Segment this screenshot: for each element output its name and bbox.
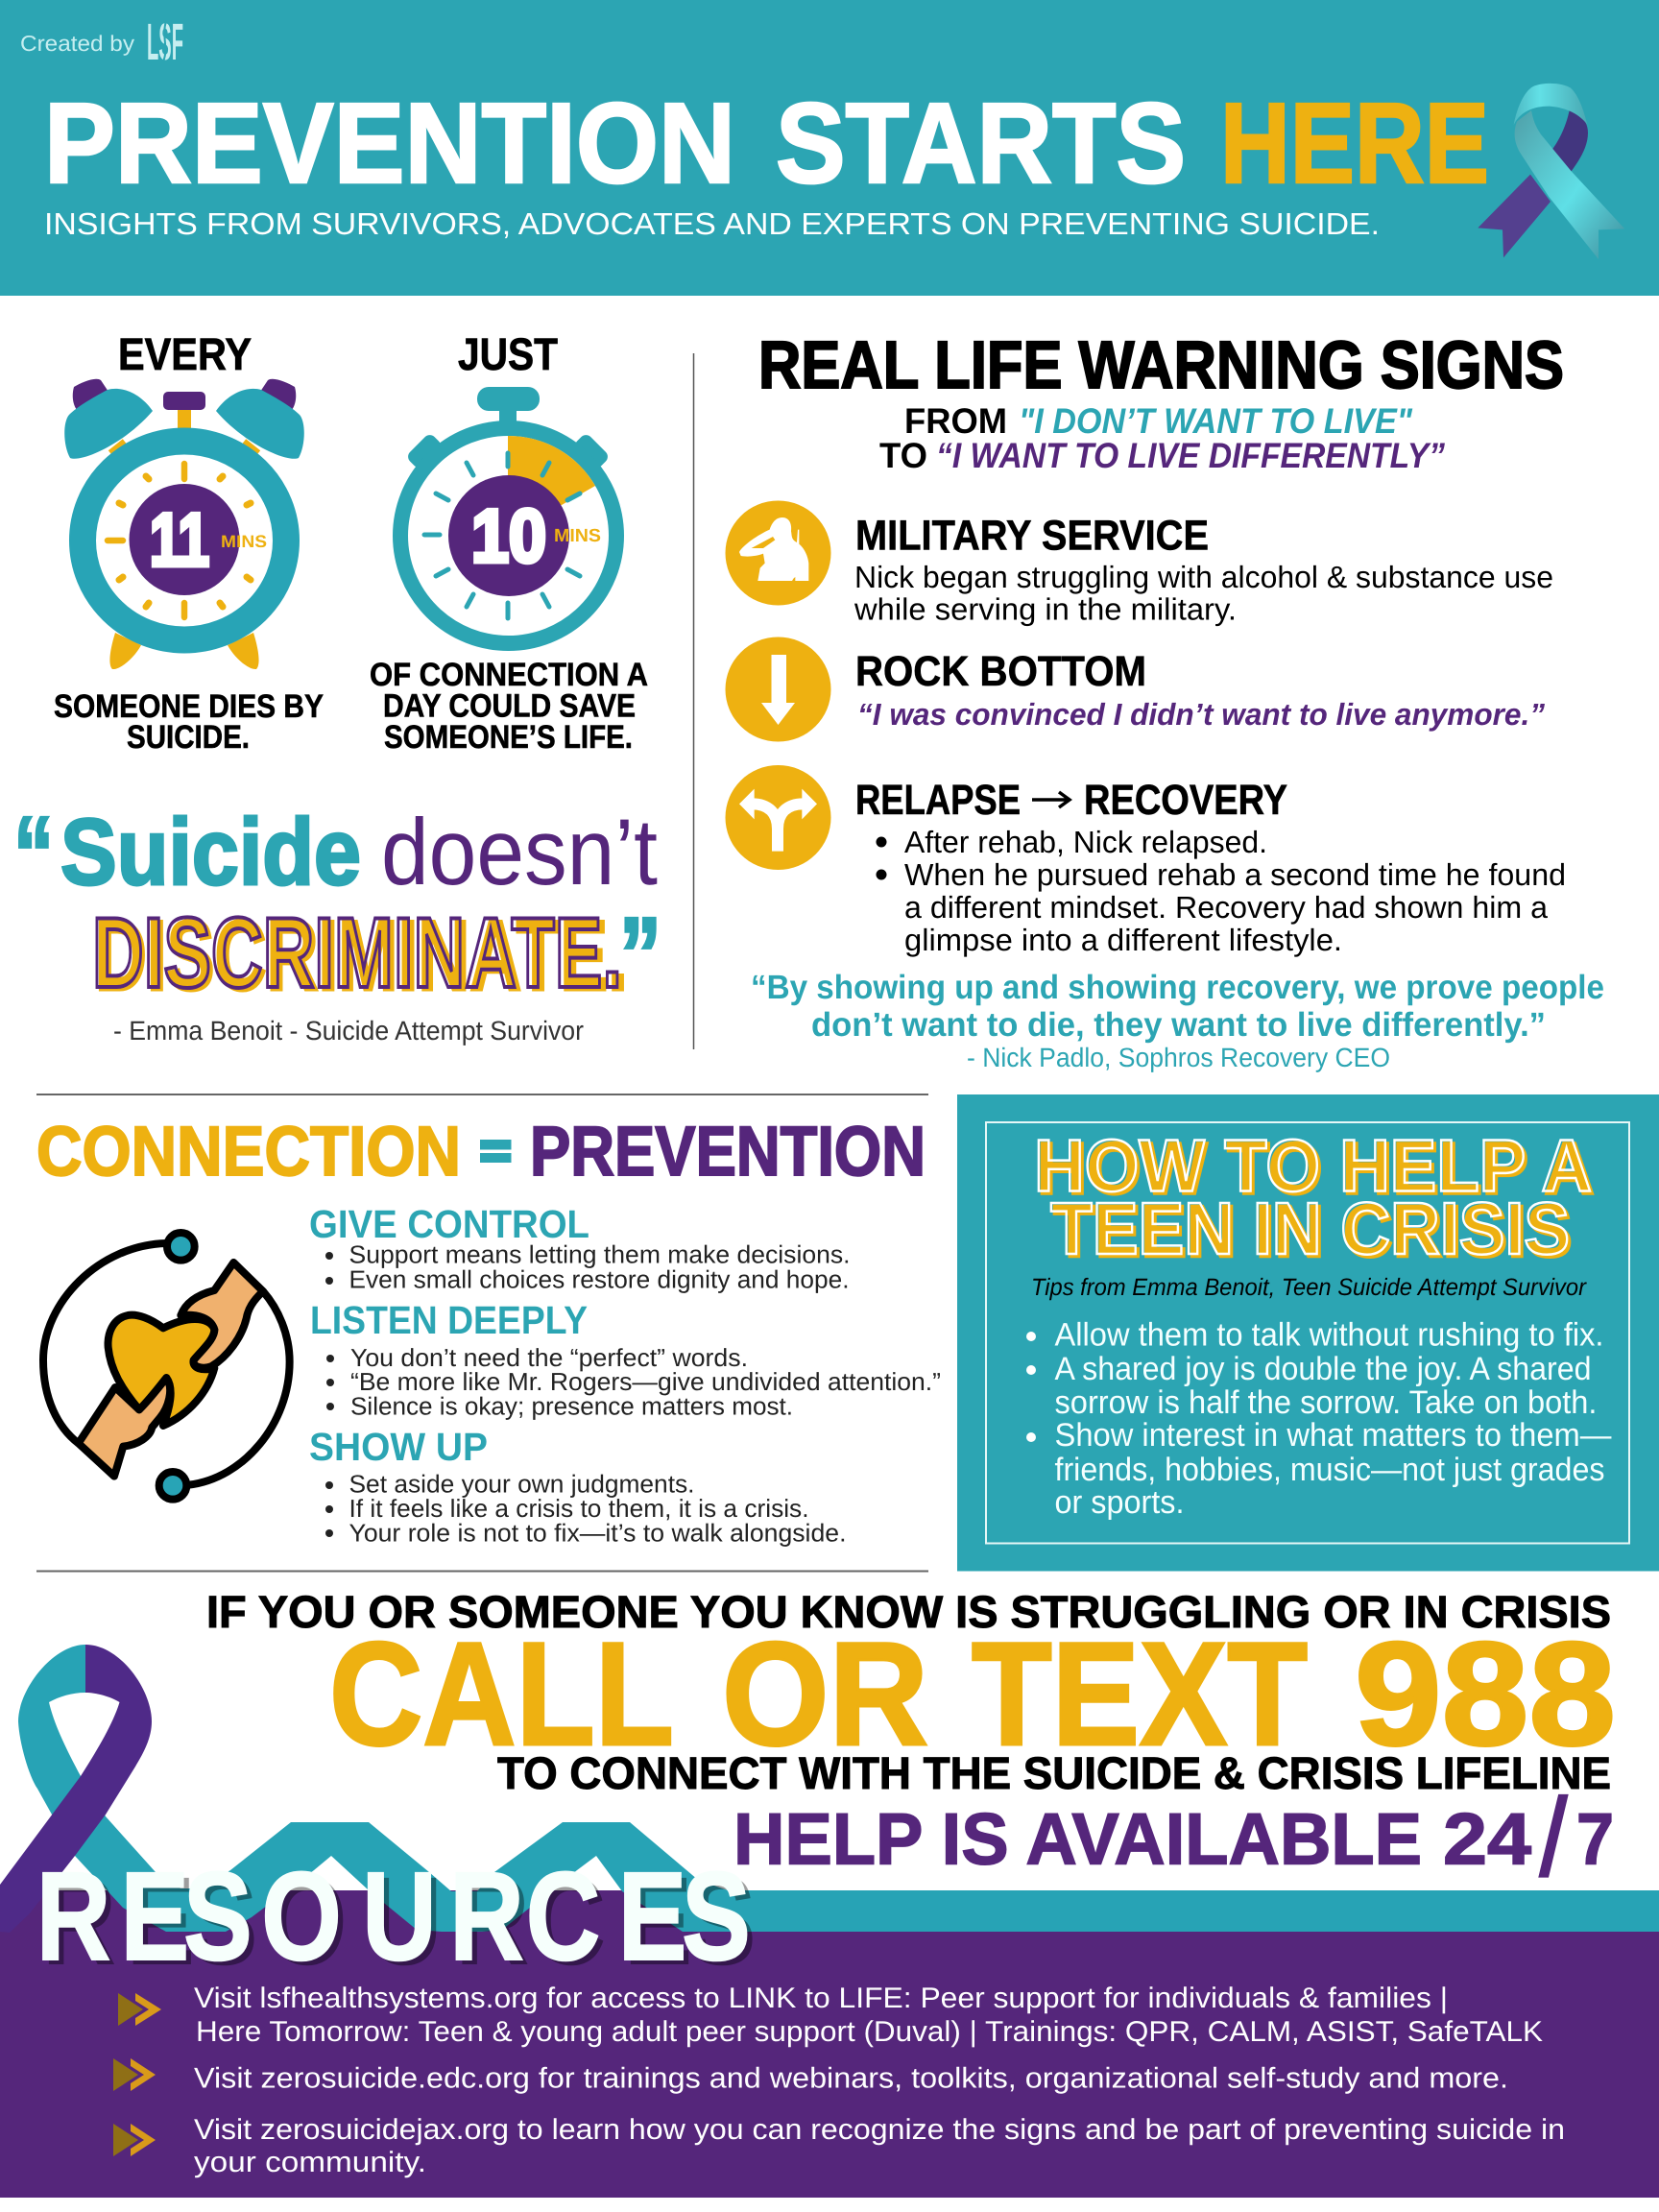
section: give control: Support means letting them make decisions.: [349, 1240, 851, 1269]
icon: purple ribbon strand: [0, 1645, 152, 1933]
call or text 988: 988: [1355, 1612, 1616, 1776]
icon: alarm clock 11 minutes: 11: [150, 497, 209, 582]
section: listen deeply: [310, 1298, 941, 1421]
icon: stopwatch 10 minutes: 10: [471, 493, 546, 578]
item: relapse to recovery: glimpse into a different lifestyle.: [904, 923, 1342, 957]
panel: call to action: HELP IS AVAILABLE: [733, 1799, 1422, 1880]
panel: header: LSF: [147, 13, 183, 71]
section: give control: Even small choices restore dignity and hope.: [349, 1265, 849, 1294]
heading: every: EVERY: [118, 328, 252, 379]
heading: TEEN IN CRISIS: [1053, 1190, 1573, 1273]
icon: down arrow: [726, 637, 831, 741]
section: listen deeply: Silence is okay; presence matters most.: [350, 1392, 793, 1421]
stat caption: connection: OF CONNECTION A: [370, 657, 648, 693]
icon: stopwatch 10 minutes: MINS: [554, 526, 601, 546]
panel: call to action: IF YOU OR SOMEONE YOU KNOW IS STRUGGLING OR IN CRISIS: [206, 1586, 1611, 1637]
quote: suicide doesn't discriminate: [13, 795, 661, 1046]
tips list: A shared joy is double the joy. A shared: [1054, 1351, 1592, 1387]
tips list: Allow them to talk without rushing to fix.: [1054, 1317, 1603, 1354]
resource item: lsf health systems: [118, 1983, 1543, 2048]
heading: TEEN IN CRISIS: [1050, 1188, 1570, 1270]
icon: awareness ribbon: [1478, 84, 1624, 259]
resource item: zero suicide jax: Visit zerosuicidejax.org to learn how you can recognize the signs and be part of preventing suicide in: [194, 2114, 1565, 2146]
section: show up: Your role is not to fix—it’s to walk alongside.: [349, 1519, 847, 1548]
icon: alarm clock 11 minutes: MINS: [221, 532, 267, 551]
tips list: Show interest in what matters to them—: [1054, 1417, 1611, 1454]
item: rock bottom: [855, 648, 1545, 732]
call or text 988: [329, 1612, 1616, 1776]
icon: alarm clock 11 minutes: [64, 379, 304, 669]
heading: HOW TO HELP A: [1037, 1127, 1595, 1210]
resource item: zero suicide jax: your community.: [194, 2147, 426, 2178]
subheading: Tips from Emma Benoit, Teen Suicide Attempt Survivor: [1031, 1274, 1588, 1301]
resource item: lsf health systems: Here Tomorrow: Teen & young adult peer support (Duval) | Trainings: QPR, CALM, ASIST, SafeTALK: [196, 2016, 1543, 2048]
created by credit: [20, 13, 183, 71]
subheading: [879, 401, 1445, 475]
stat caption: someone dies: SUICIDE.: [127, 719, 250, 756]
subheading: FROM: [904, 401, 1007, 441]
section: show up: Set aside your own judgments.: [349, 1469, 695, 1498]
title: HERE: [1220, 80, 1489, 207]
item: relapse to recovery: RECOVERY: [1084, 777, 1287, 824]
subtitle: INSIGHTS FROM SURVIVORS, ADVOCATES AND EXPERTS ON PREVENTING SUICIDE.: [44, 206, 1380, 241]
attribution: - Emma Benoit - Suicide Attempt Survivor: [113, 1016, 584, 1046]
item: relapse to recovery: a different mindset. Recovery had shown him a: [904, 890, 1548, 925]
outlined word: discriminate: DISCRIMINATE.: [95, 901, 628, 1012]
panel: suicide statistics: [54, 328, 648, 756]
section: listen deeply: You don’t need the “perfect” words.: [350, 1343, 748, 1372]
heading: HOW TO HELP A: [1034, 1125, 1592, 1208]
quote: suicide doesn't discriminate: doesn’t: [381, 799, 658, 904]
call or text 988: TEXT: [972, 1612, 1308, 1776]
resource item: zero suicide: Visit zerosuicide.edc.org for trainings and webinars, toolkits, organizational self-study and more.: [194, 2062, 1508, 2095]
stat caption: connection: [370, 657, 648, 756]
title: PREVENTION: [44, 80, 735, 207]
icon: forking arrows: [726, 765, 831, 870]
tips list: [1026, 1317, 1611, 1521]
stat caption: someone dies: SOMEONE DIES BY: [54, 688, 324, 725]
panel: connection equals prevention: [36, 1113, 941, 1548]
item: military service: MILITARY SERVICE: [855, 513, 1209, 559]
tips list: sorrow is half the sorrow. Take on both.: [1054, 1384, 1598, 1421]
item: rock bottom: ROCK BOTTOM: [855, 648, 1146, 695]
item: rock bottom: “I was convinced I didn’t want to live anymore.”: [857, 697, 1545, 732]
subheading: TO: [879, 436, 927, 475]
item: military service: [854, 513, 1553, 626]
icon: saluting soldier: [726, 501, 831, 605]
item: relapse to recovery: RELAPSE: [855, 777, 1021, 824]
quote: nick padlo: “By showing up and showing recovery, we prove people: [751, 969, 1604, 1006]
panel: call to action: 24: [1443, 1799, 1531, 1880]
opening quotation mark: “: [13, 795, 54, 913]
closing quotation mark: ”: [619, 896, 661, 1014]
panel: call to action: /: [1540, 1777, 1567, 1899]
panel: how to help a teen in crisis: [957, 1094, 1659, 1571]
panel: call to action: TO CONNECT WITH THE SUICIDE & CRISIS LIFELINE: [497, 1747, 1611, 1798]
tips list: friends, hobbies, music—not just grades: [1054, 1452, 1605, 1488]
section: show up: SHOW UP: [309, 1425, 488, 1469]
section: give control: [309, 1202, 851, 1294]
section: give control: GIVE CONTROL: [309, 1202, 589, 1246]
quote: nick padlo: - Nick Padlo, Sophros Recovery CEO: [967, 1043, 1390, 1072]
ribbon wave band: [18, 1645, 1659, 1932]
subheading: "I DON’T WANT TO LIVE": [1019, 401, 1412, 441]
heading: REAL LIFE WARNING SIGNS: [758, 327, 1564, 402]
panel: real life warning signs: [726, 327, 1604, 1072]
call or text 988: OR: [722, 1612, 928, 1776]
heading: CONNECTION: [36, 1113, 461, 1190]
item: military service: Nick began struggling with alcohol & substance use: [854, 560, 1553, 594]
tips list: or sports.: [1054, 1484, 1185, 1521]
heading with shadow: RESOURCES: [36, 1845, 751, 1986]
resource item: zero suicide jax: [113, 2114, 1565, 2178]
heading: just: JUST: [458, 328, 558, 379]
outlined word: discriminate: DISCRIMINATE.: [92, 898, 622, 1009]
panel: resources: [0, 1645, 1659, 2198]
call or text 988: CALL: [329, 1612, 674, 1776]
section: listen deeply: “Be more like Mr. Rogers—give undivided attention.”: [350, 1367, 941, 1396]
heading: PREVENTION: [530, 1113, 926, 1190]
heading with shadow: RESOURCES: [42, 1850, 757, 1991]
stat caption: someone dies: [54, 688, 324, 756]
stat caption: connection: SOMEONE’S LIFE.: [384, 719, 633, 756]
quote: nick padlo: [751, 969, 1604, 1072]
panel: call to action: 7: [1576, 1799, 1614, 1880]
icon: stopwatch 10 minutes: [400, 387, 616, 643]
icon: hands holding heart: [43, 1233, 290, 1500]
heading: [36, 1113, 926, 1190]
panel: header: [0, 0, 1659, 296]
quote: nick padlo: don’t want to die, they want to live differently.”: [811, 1006, 1546, 1044]
title: [44, 80, 1489, 207]
heading: [1034, 1125, 1595, 1273]
resource item: lsf health systems: Visit lsfhealthsystems.org for access to LINK to LIFE: Peer support for individuals & families |: [194, 1983, 1448, 2014]
item: military service: while serving in the military.: [854, 591, 1237, 626]
stat caption: connection: DAY COULD SAVE: [383, 687, 636, 724]
item: relapse to recovery: When he pursued rehab a second time he found: [904, 857, 1566, 892]
panel: call to action: [206, 1586, 1616, 1899]
section: show up: [309, 1425, 847, 1548]
quote: suicide doesn't discriminate: Suicide: [60, 799, 361, 904]
section: listen deeply: LISTEN DEEPLY: [310, 1298, 588, 1342]
item: relapse to recovery: [855, 777, 1566, 957]
item: relapse to recovery: After rehab, Nick relapsed.: [904, 825, 1267, 859]
title: STARTS: [776, 80, 1186, 207]
subheading: “I WANT TO LIVE DIFFERENTLY”: [936, 436, 1445, 475]
created by credit: Created by: [20, 31, 135, 56]
section: show up: If it feels like a crisis to them, it is a crisis.: [349, 1494, 808, 1523]
